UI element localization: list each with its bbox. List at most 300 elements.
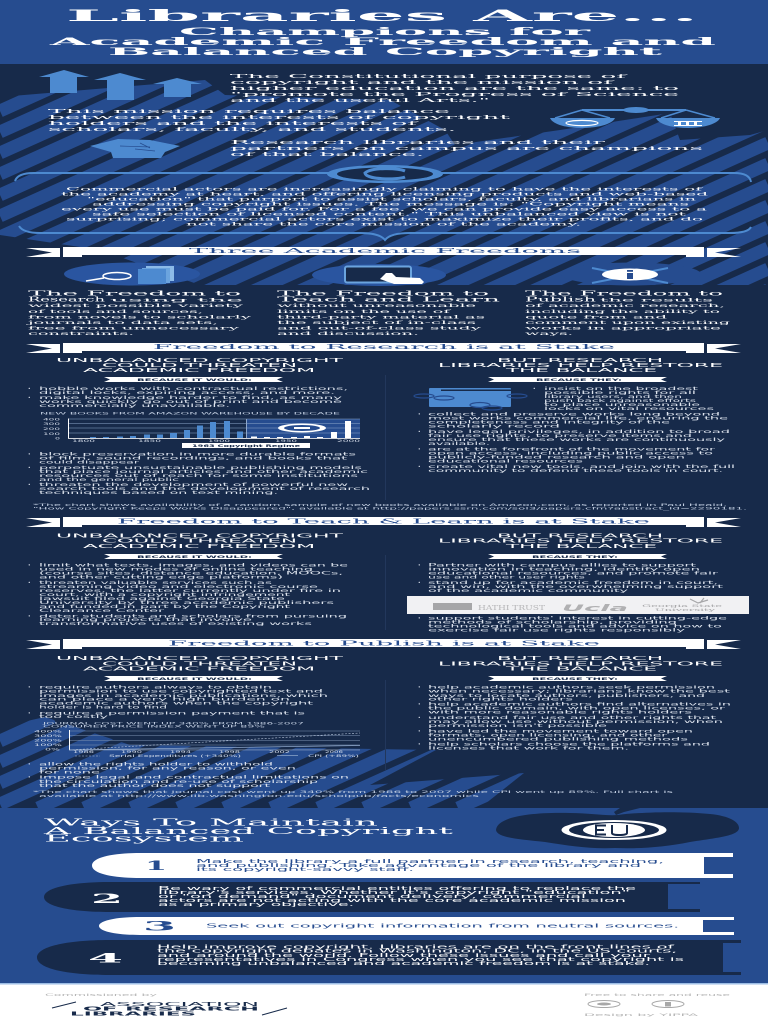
list: publishing remedies: • [418, 686, 421, 691]
list: teaching remedies top: • [418, 581, 421, 586]
list: research threats bottom: block preservation in more durable formats [39, 452, 359, 458]
list: teaching threats: used in new modes of online teaching [39, 566, 314, 572]
list: publishing threats top: permission to use copyrighted text and [39, 689, 324, 695]
list: research threats bottom: could disappear [39, 460, 140, 466]
list: research remedies: most works commercial life, ensuring the [428, 416, 729, 422]
heading: but research libraries: THE BALANCE [502, 544, 657, 550]
list: teaching threats: learning projects that involve [39, 617, 253, 623]
callout: commercial actors bracket: every use must be paid for. For a fee, we can provide easy access to a [61, 206, 707, 212]
label: because they [488, 377, 667, 382]
text: freedom to teach and learn: the subject of in-class [277, 320, 478, 326]
list: teaching threats: reserves, the latter currently under fire in [39, 588, 342, 594]
line chart: journal cost vs CPI: 300% [34, 734, 62, 738]
list: publishing threats bottom: for none [39, 770, 101, 776]
label: because they [488, 554, 667, 559]
list: teaching remedies top: of the academic community [428, 588, 630, 594]
text: research libraries champions [230, 140, 703, 158]
step 2: actors are not acting with the core academic mission [158, 898, 626, 904]
logo: Association of Research Libraries [45, 993, 287, 1018]
text: freedom to research: The Freedom to [28, 290, 241, 298]
text: constitutional purpose: copyright and the mission of [230, 80, 617, 86]
bar chart: new books from Amazon: 1800 [72, 439, 95, 443]
list: research remedies: to place unreasonable [544, 402, 701, 408]
text: mission requires balance: scholars, faculty, and students. [48, 127, 457, 133]
list: teaching remedies bottom: • [418, 617, 421, 622]
footnote: research chart: *The chart shows availability of a random sample of new books available on Amazon.com, as reported in Paul Heald, [33, 503, 727, 507]
step 4: becoming unbalanced and academic freedom is at stake. [157, 961, 650, 967]
panel: teaching threats [28, 533, 349, 627]
heading: unbalanced copyright: UNBALANCED COPYRIGHT [56, 656, 346, 662]
step 1: Make the library a full partner in research, teaching, [196, 859, 666, 865]
label: because it would: BECAUSE IT WOULD: [137, 377, 253, 382]
text: research libraries champions: Research libraries and their [230, 140, 606, 146]
list: publishing remedies: • [418, 729, 421, 734]
bar chart: new books from Amazon: 0 [55, 436, 60, 440]
list: teaching remedies top: and win, with the overwhelming support [428, 584, 724, 590]
list: teaching remedies top: use and other user rights [428, 575, 587, 581]
list: research remedies: • [418, 465, 421, 470]
bar chart: new books from Amazon: NEW BOOKS FROM AMAZON WAREHOUSE BY DECADE [40, 412, 342, 416]
list: research remedies: create vital new tools, and join with the full [428, 464, 735, 470]
label: because it would [104, 554, 283, 559]
text: freedom to publish: including the ability to [525, 309, 720, 315]
list: research threats bottom: of film, sound recordings, and books that [39, 456, 348, 462]
list: research threats bottom: resources out of reach for some institutions [39, 473, 361, 479]
list: publishing threats bottom: allow the rights holder to withhold [39, 762, 274, 768]
label: because it would [104, 676, 283, 681]
license: creative commons [584, 993, 733, 1017]
bar chart: new books from Amazon: 2000 [337, 439, 360, 443]
label: because they [488, 676, 667, 681]
text: freedom to research: using the [110, 298, 244, 304]
heading: ways to maintain [40, 819, 455, 845]
list: teaching remedies top [418, 562, 724, 594]
list: research remedies: • [418, 412, 421, 418]
bar chart: new books from Amazon: 200 [43, 427, 60, 431]
list: teaching threats [28, 562, 349, 627]
text: research libraries champions: of that balance. [230, 152, 425, 158]
label: because it would [104, 377, 283, 382]
list: research threats top: commercially unavailable. [39, 403, 230, 409]
line chart: journal cost vs CPI: 1998 [219, 750, 240, 754]
list: teaching threats: limit what texts, images, and videos can be [39, 562, 349, 568]
list: publishing remedies: with more reasonable rights holders [428, 710, 695, 716]
list: research remedies: insist on the broadest [544, 386, 699, 392]
step 2: 2 [91, 892, 123, 907]
list: publishing remedies: licenses that work for them. [428, 746, 629, 752]
list: publishing remedies: unencumbered publishing methods [428, 736, 691, 742]
list: research remedies: • [418, 430, 421, 435]
text: mission requires balance: holders and the interests of [48, 121, 421, 127]
list: publishing threats bottom: permission, for any reason, or even [39, 766, 297, 772]
heading: but research libraries [438, 358, 723, 374]
callout: commercial actors bracket: addressing copyright issues. The message is: "Copyright means [92, 202, 691, 208]
icon: apple with copyright [496, 808, 739, 848]
list: teaching threats: lawsuit filed against Georgia State [39, 596, 286, 602]
panel: research threats [28, 358, 371, 496]
list: publishing remedies: help academic authors find alternatives in [428, 702, 732, 708]
text: freedom to teach and learn: limits on the use of [277, 309, 455, 315]
callout: commercial actors bracket: not share the core mission of the academy. [186, 222, 583, 228]
logos: HathiTrust, UCLA, Georgia State: University [655, 608, 718, 612]
bar chart: new books from Amazon: 300 [43, 422, 60, 426]
step 4 [37, 940, 741, 975]
icon: balance scales [550, 107, 720, 128]
list: publishing remedies: understand fair use and other rights that [428, 715, 717, 721]
list: publishing threats bottom [28, 762, 350, 789]
step 4: and around the world. Follow these issues and call your [157, 953, 650, 959]
footnote: research chart [33, 503, 747, 511]
text: freedom to research: free from unnecessary [28, 326, 240, 332]
list: research remedies: are at the forefront of the movement for [428, 446, 716, 452]
list: teaching remedies bottom: support students' interest in cutting-edge [428, 616, 728, 622]
list: publishing threats bottom: • [28, 763, 31, 768]
banner: freedom to research at stake: Freedom to Research is at Stake [153, 343, 615, 351]
list: research remedies: ensure that these works are continuously [428, 437, 727, 443]
list: research threats bottom: • [28, 452, 31, 458]
header: title band: Libraries Are... [66, 6, 698, 25]
text: mission requires balance [48, 109, 513, 133]
label: because it would: BECAUSE IT WOULD: [137, 554, 253, 559]
step 4: 4 [88, 952, 123, 967]
line chart: journal cost vs CPI [34, 722, 360, 758]
heading: but research libraries: LIBRARIES HELP RESTORE [438, 363, 723, 369]
label: because they: BECAUSE THEY: [532, 554, 619, 559]
panel: research remedies [414, 358, 735, 474]
text: freedom to publish: ways. [525, 332, 575, 337]
heading: but research libraries: BUT RESEARCH [497, 358, 663, 364]
banner: freedom to publish at stake: Freedom to Publish is at Stake [168, 640, 600, 648]
label: because they: BECAUSE THEY: [532, 676, 619, 681]
text: constitutional purpose: and the useful Arts." [230, 98, 491, 104]
list: research threats top: • [28, 387, 31, 392]
list: teaching remedies top: Partner with campus allies to support [428, 562, 697, 568]
list: publishing threats top: holder is hard to find [39, 705, 168, 711]
text: freedom to publish [525, 290, 730, 337]
heading: ways to maintain: Ways To Maintain [44, 819, 379, 829]
list: research remedies [418, 386, 735, 474]
line chart: journal cost vs CPI: JOURNAL COST WENT UP 340% FROM 1986-2007 [40, 722, 304, 726]
header: title band: Balanced Copyright [108, 46, 663, 58]
line chart: journal cost vs CPI: 2002 [269, 750, 290, 754]
list: research threats bottom: search tools and the development of research [39, 486, 371, 492]
heading: but research libraries: THE BALANCE [502, 368, 657, 374]
header: title band: Champions for [179, 26, 592, 38]
heading: unbalanced copyright: ACADEMIC FREEDOM [83, 368, 315, 374]
heading: unbalanced copyright [56, 358, 346, 374]
bar chart: new books from Amazon: 1950 [275, 439, 297, 443]
license: creative commons: Free to share and reuse [584, 993, 733, 997]
list: publishing threats top: can place a very high burden on [39, 697, 291, 703]
list: research remedies: educational resources [428, 458, 585, 464]
step 2: as a primary objective. [158, 902, 354, 908]
list: publishing threats top: require authors always to obtain [39, 685, 273, 691]
footnote: journal cost chart: available at http://www.lib.washington.edu/scholpub/facts/economics [39, 794, 479, 798]
text: mission requires balance: This mission requires balance [48, 109, 453, 115]
heading: unbalanced copyright: UNBALANCED COPYRIGHT [56, 533, 346, 539]
heading: but research libraries: LIBRARIES HELP RESTORE [438, 661, 723, 667]
list: publishing remedies: may allow use without permission, when [428, 719, 724, 725]
heading: ways to maintain: A Balanced Copyright [40, 827, 455, 837]
list: research remedies: locks on vital resources [544, 406, 717, 412]
list: research remedies: community to defend these tools in court. [428, 468, 723, 474]
step 2: or "on demand" document delivery, commercial [158, 894, 586, 900]
step 3 [99, 917, 734, 935]
license: creative commons: Design by YIPPA [584, 1013, 700, 1017]
logo: Association of Research Libraries: LIBRARIES [70, 1012, 197, 1018]
header: title band: Academic Freedom and [45, 36, 719, 48]
heading: unbalanced copyright [56, 533, 346, 550]
logos: HathiTrust, UCLA, Georgia State: Ucla [562, 604, 628, 614]
text: mission requires balance: between the interests of copyright [48, 115, 513, 121]
heading: unbalanced copyright: ACADEMIC FREEDOM [83, 544, 315, 550]
logos: HathiTrust, UCLA, Georgia State: Georgia State [642, 604, 722, 608]
icon: freedom to teach tablet [312, 264, 446, 286]
line chart: journal cost vs CPI: CPI (+89%) [308, 754, 359, 758]
logos: HathiTrust, UCLA, Georgia State [407, 596, 749, 614]
list: teaching threats: court, with a copyright infringement [39, 592, 291, 598]
step 1 [92, 853, 733, 878]
footnote: research chart: "How Copyright Keeps Works Disappeared", available at http://papers.ssrn.com/sol3/papers.cfm?abstract_id=2290181. [33, 507, 747, 511]
list: publishing remedies: when necessary; librarians know the best [428, 689, 731, 695]
bar chart: new books from Amazon: 400 [43, 418, 60, 422]
text: freedom to teach and learn: and out-of-class study [277, 326, 482, 332]
list: research remedies: possible rights for all [544, 390, 696, 396]
step 1: 1 [145, 859, 167, 874]
logo: Association of Research Libraries: ASSOCIATION [100, 1002, 259, 1008]
step 4: Help improve copyright. Libraries are on the front lines of [157, 945, 675, 951]
step 1: and publishing. Take advantage of the library and [196, 863, 641, 869]
text: freedom to publish: quote from and [525, 314, 667, 320]
list: publishing threats bottom: the circulation and re-use of scholarship [39, 779, 319, 785]
callout: commercial actors bracket: Commercial actors are increasingly claiming to have the interests of [66, 186, 707, 192]
line chart: journal cost vs CPI: 100% [34, 743, 62, 747]
line chart: journal cost vs CPI: CONSUMER PRICE INDEX WENT UP 89% [43, 725, 267, 729]
heading: but research libraries: THE BALANCE [502, 667, 657, 673]
list: publishing remedies: • [418, 703, 421, 708]
text: freedom to teach and learn: Teach and Learn [277, 296, 500, 304]
list: publishing threats bottom: that the author does not support [39, 783, 271, 789]
list: research remedies: available. [428, 441, 490, 447]
list: research threats bottom [28, 452, 371, 496]
list: research remedies: publicly-funded research and open [428, 454, 686, 460]
list: research remedies: have legal privileges, in addition to broad [428, 429, 731, 435]
text: freedom to research: journals to data sets, [24, 320, 220, 326]
list: research remedies: completeness and integrity of the [428, 420, 671, 426]
list: publishing threats top: images in academic publications, which [39, 693, 329, 699]
list: teaching threats: transformative uses of existing works [39, 621, 315, 627]
line chart: journal cost vs CPI: Serial Expenditures (+340%) [109, 754, 241, 758]
text: constitutional purpose: The Constitutional purpose of [230, 74, 630, 80]
list: teaching remedies top: innovation in teaching, identify open [428, 566, 701, 572]
text: freedom to teach and learn: third-party material as [277, 314, 487, 320]
text: freedom to publish: comment upon existing [525, 320, 730, 326]
banner: freedom to publish at stake [26, 639, 741, 649]
heading: unbalanced copyright: COULD THREATEN [102, 661, 297, 667]
list: teaching remedies bottom: technological tools and advice on how to [428, 624, 723, 630]
text: freedom to research: constraints. [28, 331, 136, 337]
list: publishing remedies: permission isn't possible [428, 723, 608, 729]
text: freedom to teach and learn: without unreasonable [277, 303, 477, 309]
list: teaching threats: threaten valuable services such as [39, 580, 274, 586]
list: publishing remedies: • [418, 716, 421, 721]
header: title band [0, 0, 768, 64]
list: teaching remedies bottom [418, 616, 728, 634]
text: freedom to publish: the results [600, 298, 715, 304]
line chart: journal cost vs CPI: 200% [34, 739, 62, 743]
bar chart: new books from Amazon: 100 [43, 432, 60, 436]
heading: unbalanced copyright: ACADEMIC FREEDOM [83, 667, 315, 673]
list: publishing remedies: ways to locate authors, publishers, and [428, 693, 706, 699]
bar chart: new books from Amazon: 1900 [208, 439, 230, 443]
footnote: journal cost chart: *The chart shows that journal cost went up 340% from 1986 to 2007 while CPI went up 89%. Full chart is [33, 790, 673, 794]
list: teaching threats: • [28, 614, 31, 619]
line chart: journal cost vs CPI: 1990 [121, 750, 142, 754]
bar chart: new books from Amazon: 1850 [138, 439, 161, 443]
list: research remedies: open access, including public access to [428, 450, 714, 456]
list: research threats bottom: techniques based on text mining. [39, 490, 278, 496]
footnote: journal cost chart [33, 790, 673, 798]
list: publishing remedies [418, 685, 732, 752]
list: publishing threats top: • [28, 686, 31, 691]
list: teaching threats: and funded in part by the Copyright [39, 604, 291, 610]
icon: freedom to publish info [561, 262, 701, 286]
footer [0, 984, 768, 1024]
list: research remedies: fair use rights, to preserve items and [428, 433, 693, 439]
list: research remedies: • [533, 387, 536, 392]
step 3: 3 [143, 920, 176, 935]
text: freedom to research: from novels to scholarly [28, 314, 252, 320]
list: teaching remedies top: • [418, 563, 421, 568]
text: constitutional purpose: "promote the Progress of Science [230, 92, 682, 98]
list: teaching threats: • [28, 581, 31, 586]
text: constitutional purpose [230, 74, 682, 104]
list: teaching threats: streaming video and electronic course [39, 584, 319, 590]
label: because it would: BECAUSE IT WOULD: [137, 676, 253, 681]
heading: ways to maintain: Ecosystem [44, 835, 246, 845]
heading: but research libraries [438, 656, 723, 673]
list: research remedies: scholarly record [428, 424, 561, 430]
panel: teaching remedies [407, 533, 749, 634]
list: research threats top [28, 386, 348, 409]
label: because they: BECAUSE THEY: [536, 377, 623, 382]
step 4: representatives in Congress when you see that copyright is [157, 957, 686, 963]
logos: HathiTrust, UCLA, Georgia State: HATHI TRUST [478, 605, 545, 612]
list: publishing threats bottom: impose legal and contractual limitations on [39, 775, 350, 781]
panel: publishing remedies [418, 656, 732, 752]
list: teaching remedies bottom: exercise fair use rights responsibly [428, 628, 687, 634]
list: teaching threats: and other cutting edge platforms) [39, 575, 284, 581]
list: teaching threats: deter students and scholars from pursuing [39, 613, 348, 619]
heading: unbalanced copyright: UNBALANCED COPYRIGHT [56, 358, 346, 364]
step 4: the copyright debates in Washington, DC, in the US courts, [157, 949, 679, 955]
list: publishing remedies: have led the movement toward open [428, 728, 694, 734]
list: publishing remedies: • [418, 743, 421, 748]
list: teaching threats: University by three academic publishers [39, 600, 337, 606]
text: freedom to teach and learn: The Freedom to [277, 290, 489, 298]
step 2: library's services. Whether it's copyright "education" [158, 890, 630, 896]
text: freedom to publish: works in appropriate [525, 326, 722, 332]
step 1: its copyright-savvy staff. [196, 867, 414, 873]
list: research threats top: digital locks, expiring access, and more. [39, 390, 335, 396]
heading: unbalanced copyright [56, 656, 346, 673]
list: research threats bottom: • [28, 483, 31, 488]
line chart: journal cost vs CPI: 1994 [170, 750, 191, 754]
list: teaching threats: (course sites, distance education, MOOCs, [39, 571, 343, 577]
list: research threats top: make knowledge harder to find, as many [39, 395, 344, 401]
list: research remedies: • [418, 448, 421, 452]
step 2: Be wary of commercial entities offering to replace the [158, 886, 636, 892]
callout: commercial actors bracket [15, 165, 751, 240]
callout: commercial actors bracket: "education" that purport to assist scholars, faculty, and librarians in [87, 196, 696, 202]
banner: freedom to teach and learn at stake [26, 517, 741, 527]
list: publishing remedies: the public domain, with open licenses, or [428, 706, 726, 712]
step 2 [44, 882, 700, 912]
list: teaching remedies bottom: methods of scholarship, providing [428, 620, 678, 626]
text: freedom to research [24, 290, 252, 337]
list: publishing remedies: help scholars choose the platforms and [428, 742, 711, 748]
icon: three up arrows [39, 70, 202, 100]
list: publishing threats top: require a permission payment that is [39, 710, 308, 716]
list: research threats top: works quickly go out of print and become [39, 399, 343, 405]
line chart: journal cost vs CPI: 2006 [325, 750, 343, 754]
logo: Association of Research Libraries: Commissioned by [45, 993, 160, 997]
list: research remedies: library users, and then [544, 394, 683, 400]
list: publishing threats top [28, 685, 329, 720]
icon: freedom to research magnifier [64, 262, 200, 286]
list: teaching remedies top: educational resources, and promote fair [428, 571, 719, 577]
list: teaching remedies top: stand up for academic freedom in court, [428, 580, 718, 586]
list: research threats top: hobble works with contractual restrictions, [39, 386, 348, 392]
bar chart: new books from Amazon: 1963 Copyright Regime [192, 444, 300, 448]
heading: but research libraries [438, 533, 723, 550]
list: publishing threats bottom: • [28, 776, 31, 781]
text: constitutional purpose: higher education are the same: to [230, 86, 681, 92]
list: research remedies: push back against efforts [544, 398, 698, 404]
text: freedom to publish: The Freedom to [525, 290, 723, 298]
list: publishing remedies: help academic authors seek permission [428, 685, 716, 691]
icon: chained book [414, 388, 527, 410]
heading: unbalanced copyright: COULD THREATEN [102, 363, 297, 369]
text: freedom to research: of tools and sources, [28, 309, 205, 315]
callout: commercial actors bracket: surprising; commercial actors exist to maximize their profits, and do [66, 216, 703, 222]
list: publishing remedies: formats, open licensing, and other [428, 732, 668, 738]
list: research threats bottom: and the general public [39, 477, 181, 483]
text: freedom to teach and learn: and discussion. [277, 331, 421, 337]
list: publishing threats top: • [28, 711, 31, 716]
list: research threats bottom: that place journal articles and other academic [39, 469, 370, 475]
text: research libraries champions: partners on campus are champions [230, 146, 703, 152]
list: publishing remedies: other rights holders [428, 697, 576, 703]
text: freedom to publish: Publish [525, 296, 596, 304]
list: research threats bottom: perpetuate unsustainable publishing models [39, 465, 365, 471]
text: freedom to research: widest possible variety [28, 303, 244, 309]
banner: three academic freedoms [26, 247, 741, 257]
list: publishing threats top: academic authors when the copyright [39, 701, 314, 707]
bar chart: new books from Amazon [40, 412, 360, 448]
list: research remedies: collect and preserve works long beyond [428, 412, 721, 418]
list: teaching threats: Clearance Center [39, 608, 165, 614]
line chart: journal cost vs CPI: 400% [34, 730, 62, 734]
step 3: Seek out copyright information from neutral sources. [206, 924, 679, 930]
list: teaching threats: • [28, 563, 31, 568]
list: research threats bottom: • [28, 466, 31, 471]
text: freedom to teach and learn [277, 290, 500, 337]
callout: commercial actors bracket: the academy at heart, and offering licensing products and web-based [61, 192, 708, 198]
icon: raised fist [90, 139, 180, 158]
text: freedom to publish: of academic research, [525, 303, 727, 309]
heading: but research libraries: BUT RESEARCH [497, 656, 663, 662]
